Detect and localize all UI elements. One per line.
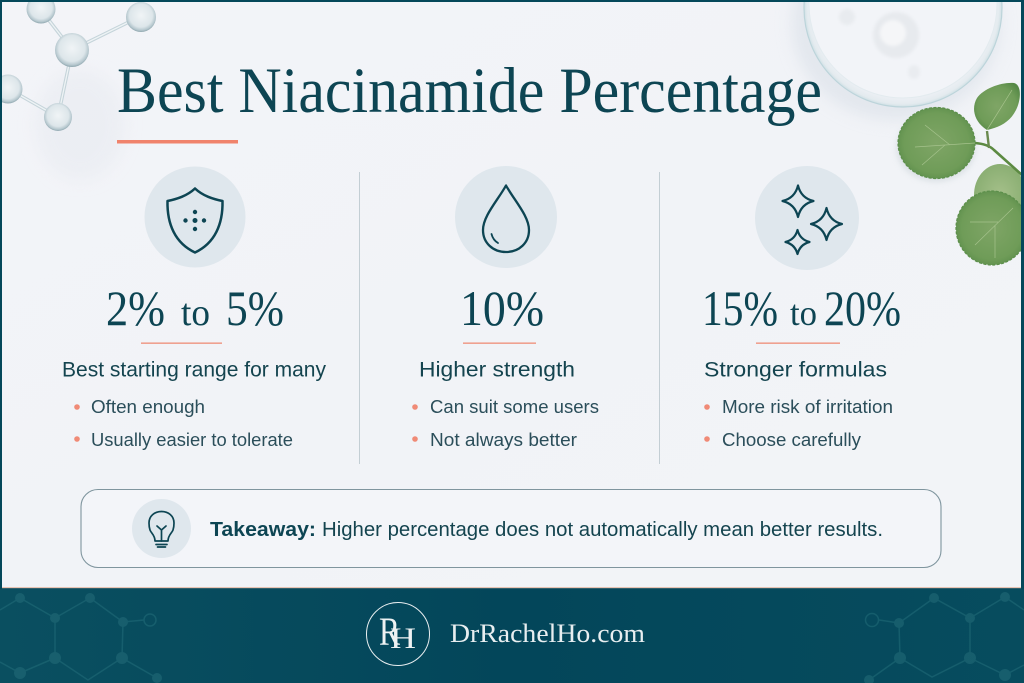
panel: column 3, 15% to 20% bbox=[702, 166, 901, 450]
decoration: right molecule pattern bbox=[864, 592, 1024, 683]
subheading: Best starting range for many bbox=[62, 358, 326, 382]
accent line bbox=[141, 342, 222, 344]
leaf: large left bbox=[898, 108, 975, 178]
percentage: 2% to 5% bbox=[106, 280, 284, 336]
panel: footer band bbox=[0, 589, 1024, 683]
callout: takeaway bbox=[81, 490, 941, 568]
bullet list: Usually easier to tolerate bbox=[91, 430, 293, 450]
subheading: Stronger formulas bbox=[704, 358, 887, 382]
icon: sparkles bbox=[755, 166, 859, 270]
divider bbox=[359, 172, 360, 464]
percentage: 15% to 20%: 20% bbox=[824, 280, 901, 336]
percentage: 2% to 5%: to bbox=[181, 292, 210, 334]
title underline bbox=[117, 140, 238, 144]
bullet list: Choose carefully bbox=[722, 430, 861, 450]
icon: shield bbox=[144, 166, 246, 268]
percentage: 2% to 5%: 2% bbox=[106, 280, 165, 336]
accent line bbox=[463, 342, 536, 344]
percentage: 15% to 20%: 15% bbox=[702, 280, 778, 336]
bullet list: More risk of irritation bbox=[722, 397, 893, 417]
percentage: 2% to 5%: 5% bbox=[226, 280, 284, 336]
leaf: top right bbox=[974, 83, 1020, 130]
subheading: Higher strength bbox=[419, 358, 575, 382]
logo: RH monogram: H bbox=[390, 622, 416, 655]
takeaway text: Takeaway: bbox=[210, 519, 316, 541]
bullet list: Can suit some users bbox=[430, 397, 599, 417]
percentage: 15% to 20%: to bbox=[790, 293, 817, 333]
icon: light bulb bbox=[132, 499, 191, 558]
leaf: lower right bbox=[956, 191, 1024, 265]
divider bbox=[659, 172, 660, 464]
percentage: 15% to 20% bbox=[702, 280, 901, 336]
panel: column 1, 2% to 5% bbox=[62, 166, 326, 450]
website name: DrRachelHo.com bbox=[450, 619, 645, 648]
bullet list bbox=[74, 397, 293, 450]
title: Best Niacinamide Percentage bbox=[117, 55, 822, 127]
bullet list bbox=[412, 397, 599, 450]
decoration: green leaves bbox=[896, 83, 1024, 265]
decoration: left molecule pattern bbox=[0, 593, 162, 683]
takeaway text: Higher percentage does not automatically mean better results. bbox=[322, 519, 883, 541]
logo: RH monogram: R bbox=[379, 609, 400, 654]
logo: RH monogram bbox=[366, 602, 430, 666]
decoration: glass molecule bbox=[2, 2, 156, 131]
panel: column 2, 10% bbox=[412, 166, 599, 450]
decoration: petri dish bbox=[792, 0, 1002, 120]
icon: water drop bbox=[455, 166, 557, 268]
percentage: 10%: 10% bbox=[460, 280, 544, 336]
bullet list: Often enough bbox=[91, 397, 205, 417]
bullet list bbox=[704, 397, 893, 450]
accent line bbox=[756, 342, 840, 344]
bullet list: Not always better bbox=[430, 430, 577, 450]
